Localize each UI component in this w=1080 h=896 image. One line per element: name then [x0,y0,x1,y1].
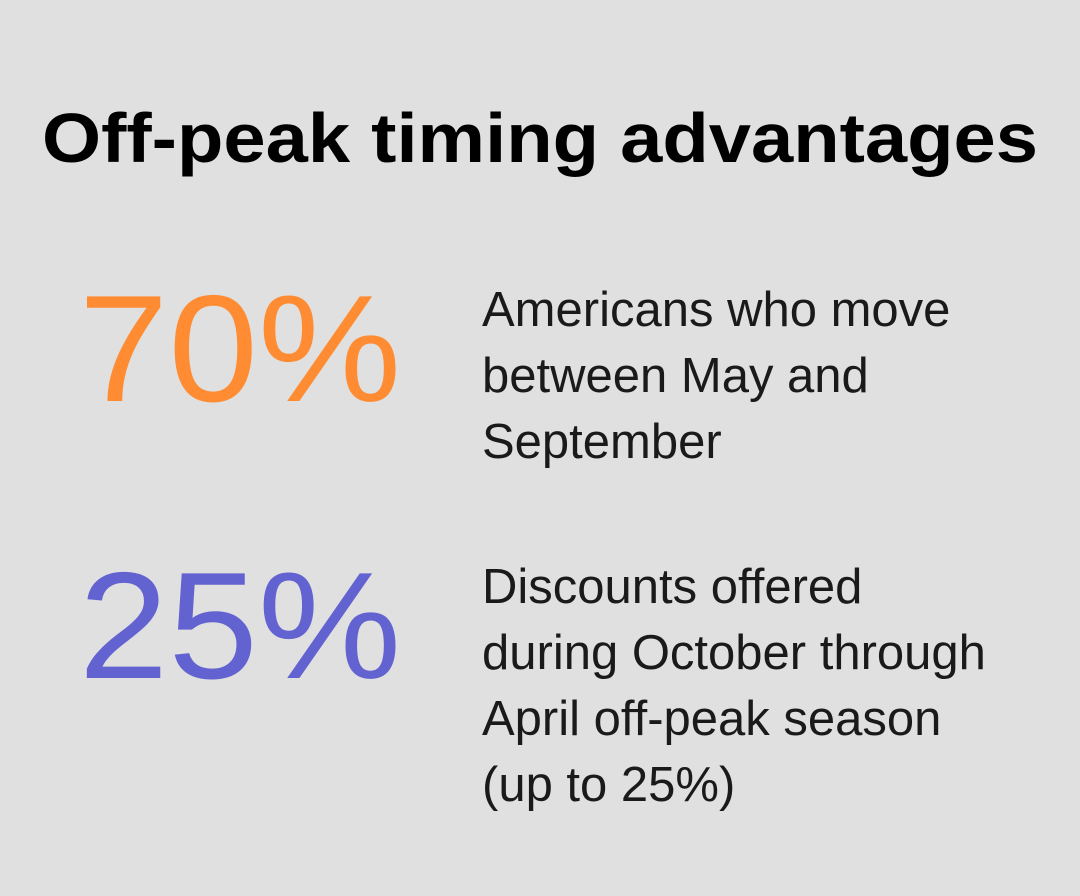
stat: 25%: 25% [79,541,401,711]
text: 25% description: (up to 25%) [482,758,735,812]
title: Off-peak timing advantages [42,99,1038,177]
stat: 70%: 70% [79,264,401,434]
text: 70% description: Americans who move [482,283,950,337]
text: 25% description [482,560,986,812]
text: 25% description: Discounts offered [482,560,862,614]
text: 70% description: between May and [482,349,869,403]
text: 70% description [482,283,950,469]
text: 25% description: during October through [482,626,986,680]
text: 70% description: September [482,415,722,469]
text: 25% description: April off-peak season [482,692,941,746]
